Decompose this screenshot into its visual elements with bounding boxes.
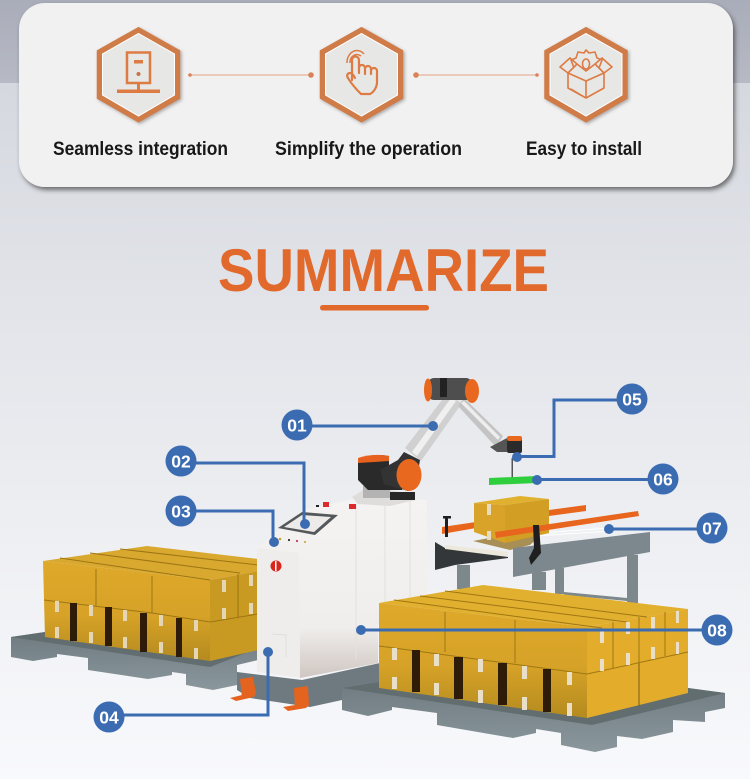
callout 08: 08: [707, 620, 727, 640]
side frame: [513, 532, 650, 577]
illustration: conveyor: [435, 496, 650, 603]
connector: integration to operation: [188, 72, 314, 78]
left pallet deck: [11, 632, 258, 667]
elbow joint: [424, 378, 479, 403]
touch screen: [278, 512, 338, 535]
label: simplify the operation: Simplify the operation: [275, 138, 462, 160]
icon: easy install hexagon: [547, 30, 625, 120]
right box stack: [379, 585, 688, 718]
title underline: [320, 305, 429, 310]
right pallet: [342, 680, 725, 752]
clamps: [443, 516, 541, 565]
buttons: [270, 502, 356, 572]
robot base: [352, 486, 415, 506]
upper arm: [405, 395, 462, 461]
callout 05: [512, 384, 648, 462]
callout 03: 03: [171, 502, 191, 522]
left pallet: [11, 632, 258, 690]
illustration: tower base pallet and feet: [230, 663, 380, 711]
callout 04: [94, 647, 273, 732]
carton on conveyor: [474, 496, 549, 543]
green gripper: [489, 476, 537, 485]
conveyor legs: [457, 555, 638, 603]
forearm: [458, 398, 503, 447]
right pallet deck: [342, 682, 725, 725]
callout 03: [166, 496, 279, 547]
callout 06: [532, 464, 678, 494]
callout 06: 06: [653, 470, 673, 490]
label: easy to install: Easy to install: [526, 138, 642, 160]
front rail: [495, 511, 639, 538]
illustration: robot arm: [352, 378, 537, 506]
connector: operation to install: [413, 72, 539, 78]
label: seamless integration: Seamless integration: [53, 138, 228, 160]
wrist: [490, 436, 522, 478]
shoulder joint: [358, 452, 422, 491]
callout 07: 07: [702, 518, 722, 538]
back rail: [442, 505, 586, 534]
callout 08: [356, 614, 732, 646]
callout 02: 02: [171, 452, 191, 472]
left box stack: [43, 546, 258, 661]
illustration: left pallet with boxes: [11, 546, 258, 690]
rollers: [445, 526, 612, 557]
orange feet: [230, 677, 309, 711]
callout 02: [166, 446, 310, 529]
icon: seamless integration hexagon: [100, 30, 178, 120]
callout 07: [604, 512, 728, 544]
illustration: right pallet with boxes: [342, 585, 725, 752]
back frame: [435, 542, 508, 570]
icon: simplify operation hexagon: [322, 30, 400, 120]
title: SUMMARIZE: [218, 237, 549, 304]
callout 04: 04: [99, 708, 119, 728]
illustration: control tower: [257, 497, 427, 678]
callout 01: 01: [287, 416, 307, 436]
callout 01: [282, 410, 438, 440]
panel: features card: [19, 3, 733, 187]
callout 05: 05: [622, 390, 642, 410]
